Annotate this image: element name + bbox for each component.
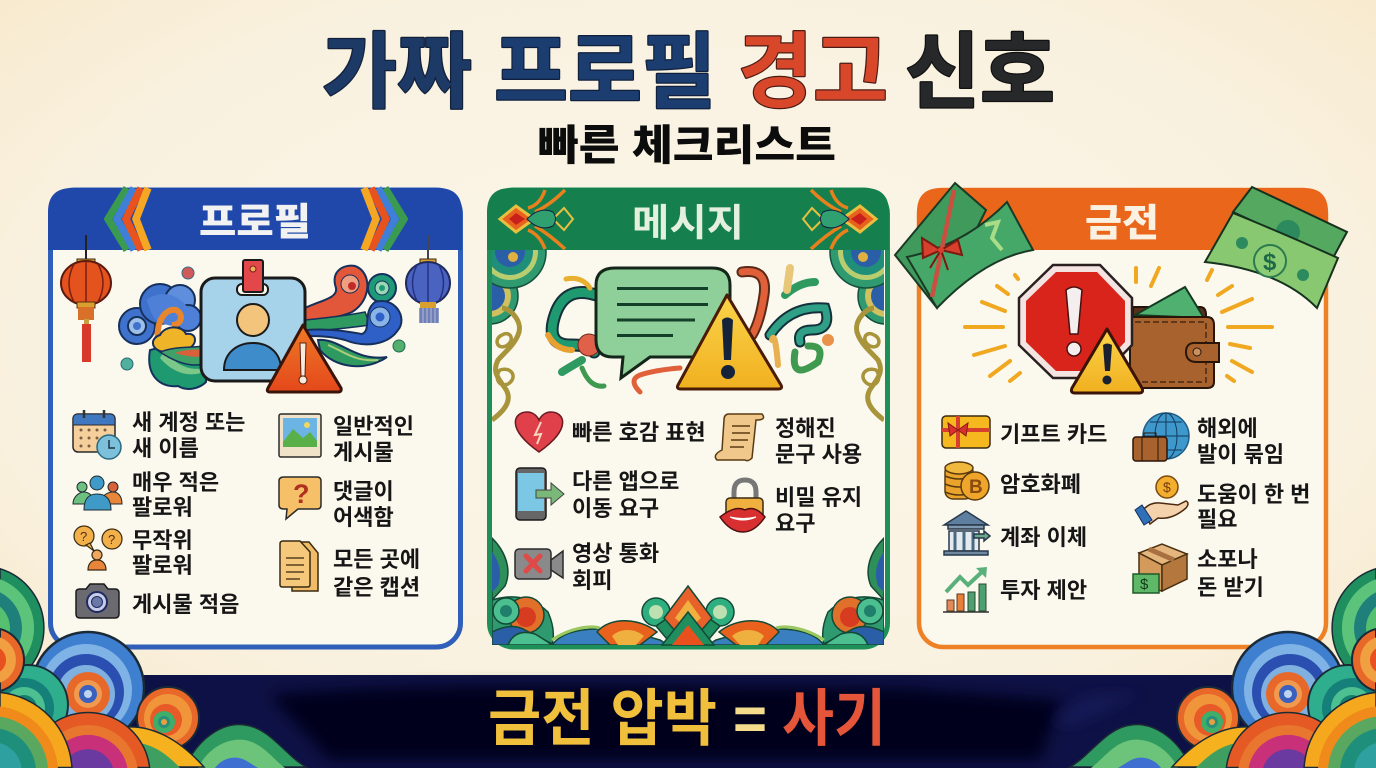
heading: 금전: [1085, 203, 1159, 245]
banner text: 사기: [782, 685, 886, 754]
icon: warning triangle: [1071, 329, 1143, 393]
banner text: [488, 685, 886, 754]
item text: 다른 앱으로: [572, 469, 679, 494]
item text: 요구: [775, 511, 815, 536]
icon: video off: [515, 549, 563, 579]
list: 메시지 left column: [515, 412, 706, 593]
panel: 프로필: [48, 188, 462, 647]
icon: scroll: [715, 414, 764, 461]
item text: 계좌 이체: [1000, 525, 1087, 550]
header band: [48, 188, 462, 250]
icon: ID badge: [201, 260, 305, 381]
item text: 어색함: [333, 505, 394, 530]
icon: globe and suitcase: [1133, 413, 1189, 461]
icon: documents: [280, 541, 318, 591]
icon: question bubble: [279, 477, 321, 519]
icon: parcel and cash: [1133, 544, 1187, 593]
item text: 게시물 적음: [132, 592, 239, 617]
border ornaments: [492, 250, 884, 646]
title: 경고: [738, 26, 888, 119]
item text: 기프트 카드: [1000, 422, 1107, 447]
item text: 해외에: [1197, 416, 1258, 441]
item text: 회피: [572, 568, 612, 593]
item text: 비밀 유지: [775, 485, 862, 510]
item text: 이동 요구: [572, 496, 659, 521]
title: 프로필: [494, 26, 716, 119]
icon: investment chart: [943, 567, 989, 612]
list: 프로필 right column: [279, 414, 420, 600]
item text: 새 이름: [132, 436, 199, 461]
item text: 발이 묶임: [1197, 442, 1284, 467]
icon: calendar with clock: [73, 410, 121, 459]
item text: 문구 사용: [775, 442, 862, 467]
item text: 같은 캡션: [333, 575, 420, 600]
panel: 메시지: [487, 188, 890, 650]
icon: parcel and cash: $: [1140, 576, 1149, 593]
title: 가짜: [322, 26, 472, 119]
decoration: left corner waves: [0, 569, 306, 768]
item text: 빠른 호감 표현: [572, 420, 706, 445]
icon: random followers: ?: [80, 529, 87, 544]
illustration: gift money: [895, 183, 1033, 308]
item text: 게시물: [333, 440, 394, 465]
panel: 금전: [895, 183, 1347, 647]
header band: [917, 188, 1328, 250]
heading: 프로필: [199, 202, 311, 244]
illustration: dollar bills: [1205, 187, 1347, 308]
item text: 일반적인: [333, 414, 414, 439]
icon: locked lips: [720, 480, 765, 532]
icon: warning triangle: [267, 325, 341, 392]
icon: red lantern: [61, 235, 111, 362]
chat bubble: [596, 268, 730, 378]
icon: phone with arrow: [516, 468, 564, 520]
item text: 필요: [1197, 507, 1237, 532]
heading: 메시지: [632, 203, 744, 245]
decorative swirls: [548, 268, 827, 392]
icon: hand with coin: [1135, 476, 1188, 525]
banner text: =: [733, 685, 767, 754]
center lotus: [662, 586, 714, 645]
item text: 매우 적은: [132, 470, 219, 495]
subtitle: 빠른 체크리스트: [538, 122, 836, 169]
icon: blue lantern: [406, 235, 450, 323]
warning triangle: [677, 295, 782, 389]
illustration: rays: [965, 268, 1272, 381]
icon: random followers: [74, 526, 122, 570]
item text: 모든 곳에: [333, 547, 420, 572]
item text: 도움이 한 번: [1197, 482, 1310, 507]
icon: broken heart: [515, 412, 563, 452]
illustration: profile badge with clouds: [119, 260, 405, 392]
icon: wallet: [1130, 287, 1219, 388]
list: 금전 left column: [942, 416, 1107, 612]
list: 메시지 right column: [715, 414, 862, 536]
item text: 돈 받기: [1197, 575, 1264, 600]
item text: 댓글이: [333, 479, 394, 504]
item text: 팔로워: [132, 553, 193, 578]
icon: camera: [76, 584, 119, 618]
icon: bank transfer: [944, 511, 990, 555]
icon: random followers: ?: [108, 532, 115, 547]
illustration: dollar bills: $: [1263, 249, 1277, 276]
left clouds: [119, 284, 206, 389]
title: 신호: [905, 26, 1055, 119]
item text: 암호화폐: [1000, 472, 1081, 497]
item text: 무작위: [132, 528, 193, 553]
icon: hand with coin: $: [1163, 479, 1171, 495]
list: 금전 right column: [1133, 413, 1310, 600]
icon: stop sign: [1019, 265, 1132, 378]
header band: [487, 188, 889, 250]
icon: followers: [73, 476, 122, 510]
bottom banner: [0, 675, 1376, 768]
item text: 정해진: [775, 416, 836, 441]
icon: crypto coins: [945, 462, 989, 500]
title: [322, 26, 1055, 119]
list: 프로필 left column: [73, 410, 245, 618]
illustration: chat bubble and warning: [548, 268, 834, 392]
item text: 투자 제안: [1000, 578, 1087, 603]
right clouds: [305, 266, 401, 366]
item text: 소포나: [1197, 547, 1258, 572]
item text: 팔로워: [132, 495, 193, 520]
banner text: 금전 압박: [488, 685, 717, 754]
item text: 영상 통화: [572, 541, 659, 566]
icon: gift card: [942, 416, 990, 448]
item text: 새 계정 또는: [132, 410, 245, 435]
icon: question bubble: ?: [293, 479, 310, 509]
decoration: right corner waves: [1070, 569, 1376, 768]
icon: crypto coins: B: [969, 477, 983, 498]
icon: photo: [279, 414, 321, 457]
